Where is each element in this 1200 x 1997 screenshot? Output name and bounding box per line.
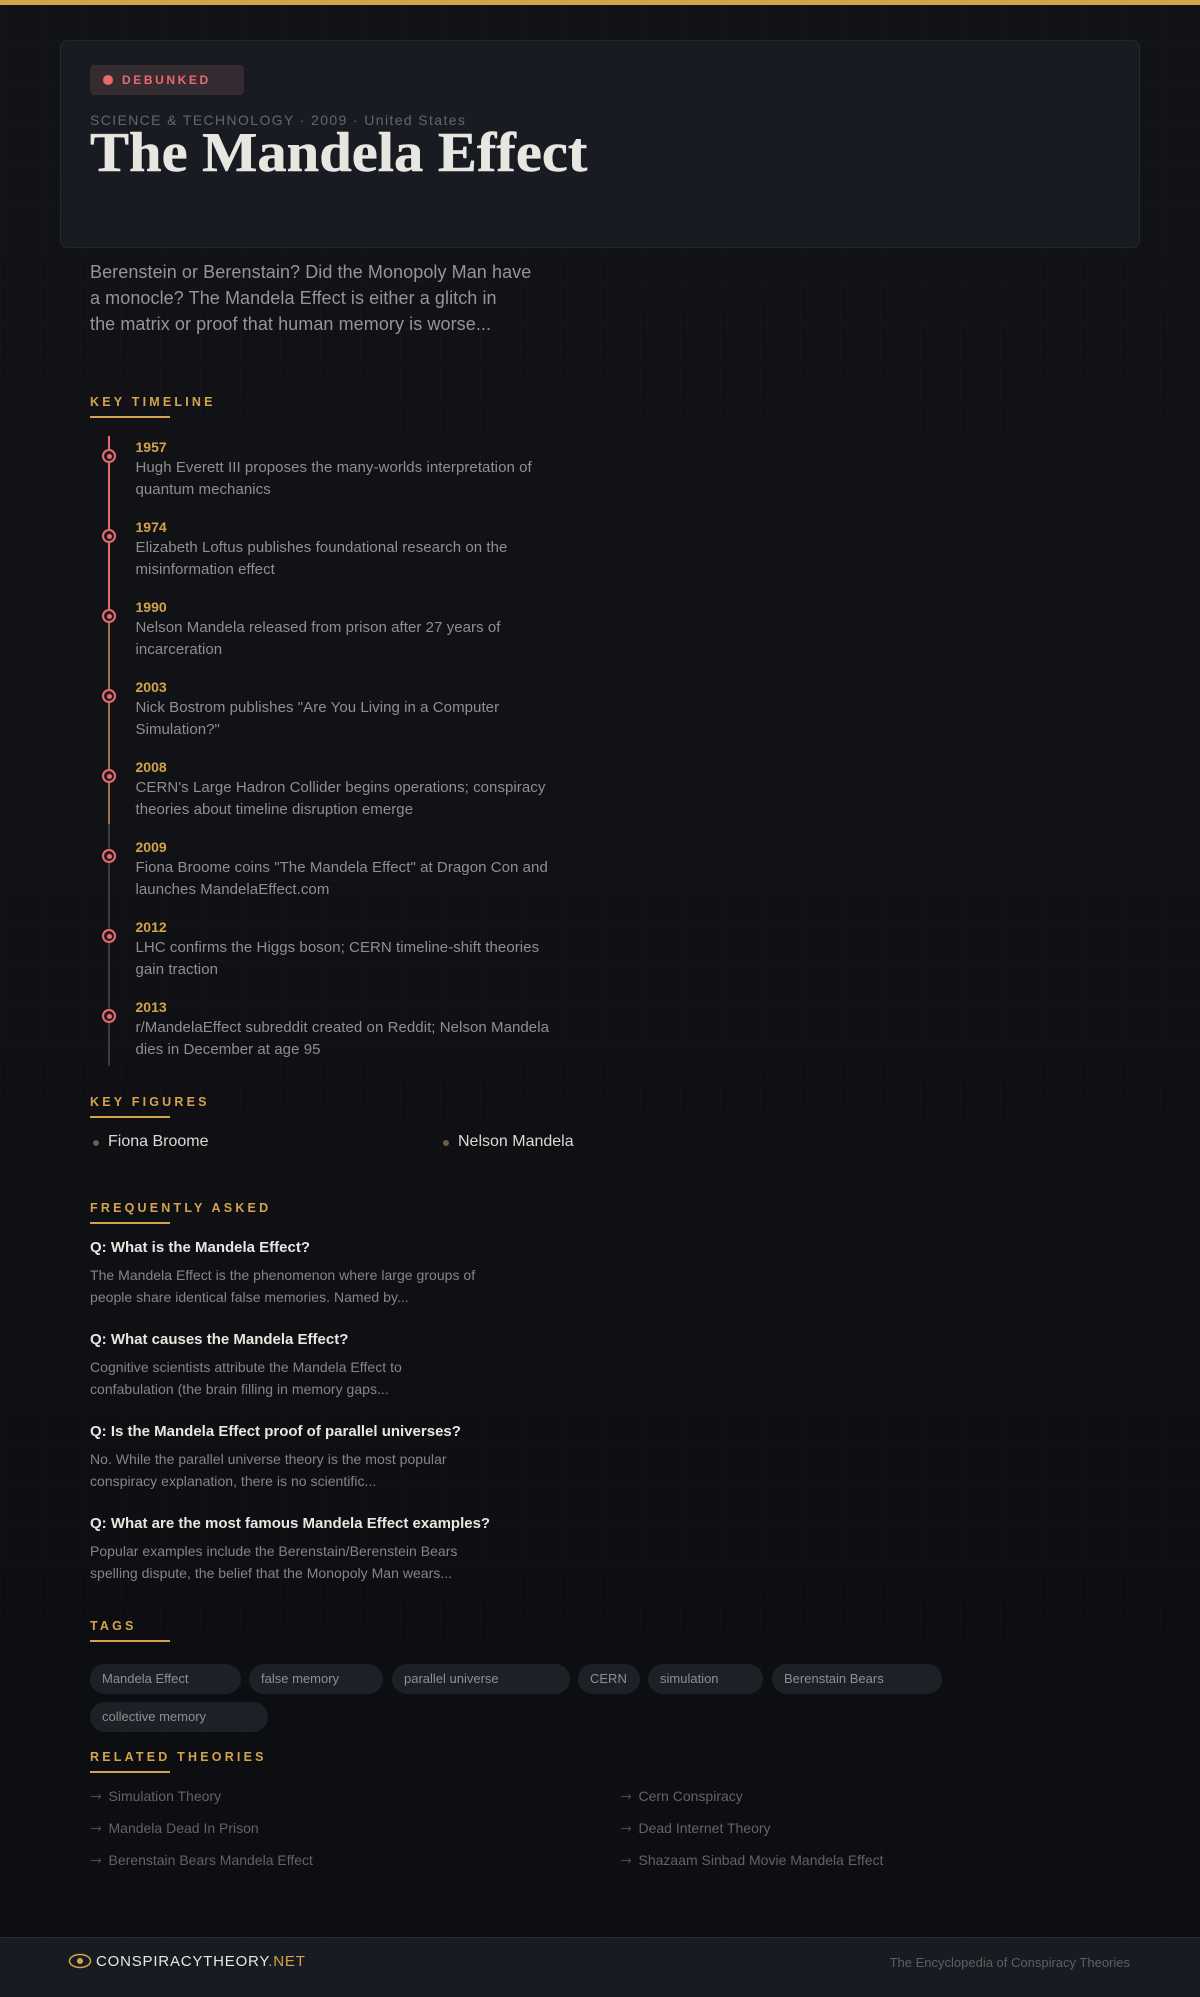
category meta line: SCIENCE & TECHNOLOGY · 2009 · United States (90, 112, 466, 128)
tag list: parallel universe (404, 1671, 499, 1686)
faq 4 (90, 1515, 490, 1581)
related links: right column: → (620, 1821, 632, 1837)
intro text: Berenstein or Berenstain? Did the Monopoly Man have (90, 262, 531, 282)
event 2013: 2013 (136, 999, 167, 1015)
faq 3: conspiracy explanation, there is no scientific... (90, 1473, 376, 1489)
faq 2 (90, 1331, 402, 1397)
event 1957: 1957 (136, 439, 167, 455)
faq 3 (90, 1423, 461, 1489)
event 1990: Nelson Mandela released from prison after 27 years of (136, 618, 501, 636)
chart: timeline (108, 436, 110, 1066)
event 2009: 2009 (136, 839, 167, 855)
heading: key figures: KEY FIGURES (90, 1095, 210, 1109)
event 2013: dies in December at age 95 (136, 1040, 321, 1058)
related links: left column (90, 1788, 313, 1869)
badge label: DEBUNKED (122, 73, 211, 87)
panel: header card (60, 40, 1140, 248)
tag list: CERN (590, 1671, 627, 1686)
event 1957 (102, 439, 532, 498)
related links: right column: → (620, 1853, 632, 1869)
tag list: false memory (261, 1671, 339, 1686)
intro text: the matrix or proof that human memory is worse... (90, 314, 491, 334)
event 2009 (102, 839, 548, 898)
related links: left column: Simulation Theory (108, 1788, 221, 1804)
logo text: CONSPIRACYTHEORY.NET (96, 1953, 306, 1970)
event 1990: incarceration (136, 640, 222, 658)
timeline rail (108, 436, 110, 1066)
tag list: collective memory (102, 1709, 206, 1724)
intro text (90, 262, 531, 334)
event 1990: 1990 (136, 599, 167, 615)
event 2003: 2003 (136, 679, 167, 695)
faq 4: Popular examples include the Berenstain/Berenstein Bears (90, 1543, 457, 1559)
related links: right column: → (620, 1789, 632, 1805)
related links: left column: → (90, 1853, 102, 1869)
tagline: The Encyclopedia of Conspiracy Theories (890, 1955, 1130, 1970)
status badge (90, 65, 244, 95)
event 2013: r/MandelaEffect subreddit created on Reddit; Nelson Mandela (136, 1018, 549, 1036)
faq 1: Q: What is the Mandela Effect? (90, 1239, 310, 1256)
faq 2: Cognitive scientists attribute the Mandela Effect to (90, 1359, 402, 1375)
badge dot (103, 75, 113, 85)
top accent bar (0, 0, 1200, 5)
event 2012: 2012 (136, 919, 167, 935)
faq 2: confabulation (the brain filling in memory gaps... (90, 1381, 389, 1397)
tag list: Mandela Effect (102, 1671, 188, 1686)
event 1957: quantum mechanics (136, 480, 271, 498)
event 1974 (102, 519, 507, 578)
figure: Fiona Broome: Fiona Broome (108, 1132, 208, 1150)
tag list: simulation (660, 1671, 719, 1686)
event 2008 (102, 759, 546, 818)
faq 3: No. While the parallel universe theory is the most popular (90, 1451, 447, 1467)
event 2009: Fiona Broome coins "The Mandela Effect" at Dragon Con and (136, 858, 548, 876)
faq 1 (90, 1239, 476, 1305)
related links: right column: Dead Internet Theory (638, 1820, 771, 1836)
related links: left column: → (90, 1821, 102, 1837)
event 1990 (102, 599, 501, 658)
icon: eye logo (68, 1954, 92, 1968)
title: The Mandela Effect (90, 122, 587, 184)
event 1974: 1974 (136, 519, 167, 535)
faq 4: Q: What are the most famous Mandela Effect examples? (90, 1515, 490, 1532)
figure: Nelson Mandela: Nelson Mandela (458, 1132, 574, 1150)
tag list: Berenstain Bears (784, 1671, 884, 1686)
heading: frequently asked: FREQUENTLY ASKED (90, 1201, 271, 1215)
tag list (90, 1664, 942, 1732)
related links: left column: Berenstain Bears Mandela Effect (108, 1852, 313, 1868)
heading: key timeline: KEY TIMELINE (90, 395, 216, 409)
event 2003: Simulation?" (136, 720, 220, 738)
faq 1: people share identical false memories. Named by... (90, 1289, 409, 1305)
related links: left column: → (90, 1789, 102, 1805)
event 2008: 2008 (136, 759, 167, 775)
event 2003 (102, 679, 499, 738)
faq 3: Q: Is the Mandela Effect proof of parallel universes? (90, 1423, 461, 1440)
event 2012: LHC confirms the Higgs boson; CERN timeline-shift theories (136, 938, 539, 956)
footer bar (0, 1937, 1200, 1997)
heading: tags: TAGS (90, 1619, 137, 1633)
event 1974: Elizabeth Loftus publishes foundational research on the (136, 538, 507, 556)
related links: right column (620, 1788, 884, 1869)
event 2003: Nick Bostrom publishes "Are You Living in a Computer (136, 698, 499, 716)
event 2008: theories about timeline disruption emerge (136, 800, 413, 818)
faq 4: spelling dispute, the belief that the Monopoly Man wears... (90, 1565, 452, 1581)
event 1974: misinformation effect (136, 560, 275, 578)
event 2012 (102, 919, 539, 978)
heading: related theories: RELATED THEORIES (90, 1750, 267, 1764)
event 1957: Hugh Everett III proposes the many-worlds interpretation of (136, 458, 532, 476)
event 2013 (102, 999, 549, 1058)
related links: left column: Mandela Dead In Prison (108, 1820, 259, 1836)
faq 2: Q: What causes the Mandela Effect? (90, 1331, 348, 1348)
faq 1: The Mandela Effect is the phenomenon where large groups of (90, 1267, 475, 1283)
intro text: a monocle? The Mandela Effect is either a glitch in (90, 288, 497, 308)
related links: right column: Shazaam Sinbad Movie Mandela Effect (638, 1852, 883, 1868)
event 2009: launches MandelaEffect.com (136, 880, 329, 898)
related links: right column: Cern Conspiracy (638, 1788, 743, 1804)
event 2012: gain traction (136, 960, 218, 978)
event 2008: CERN's Large Hadron Collider begins operations; conspiracy (136, 778, 545, 796)
